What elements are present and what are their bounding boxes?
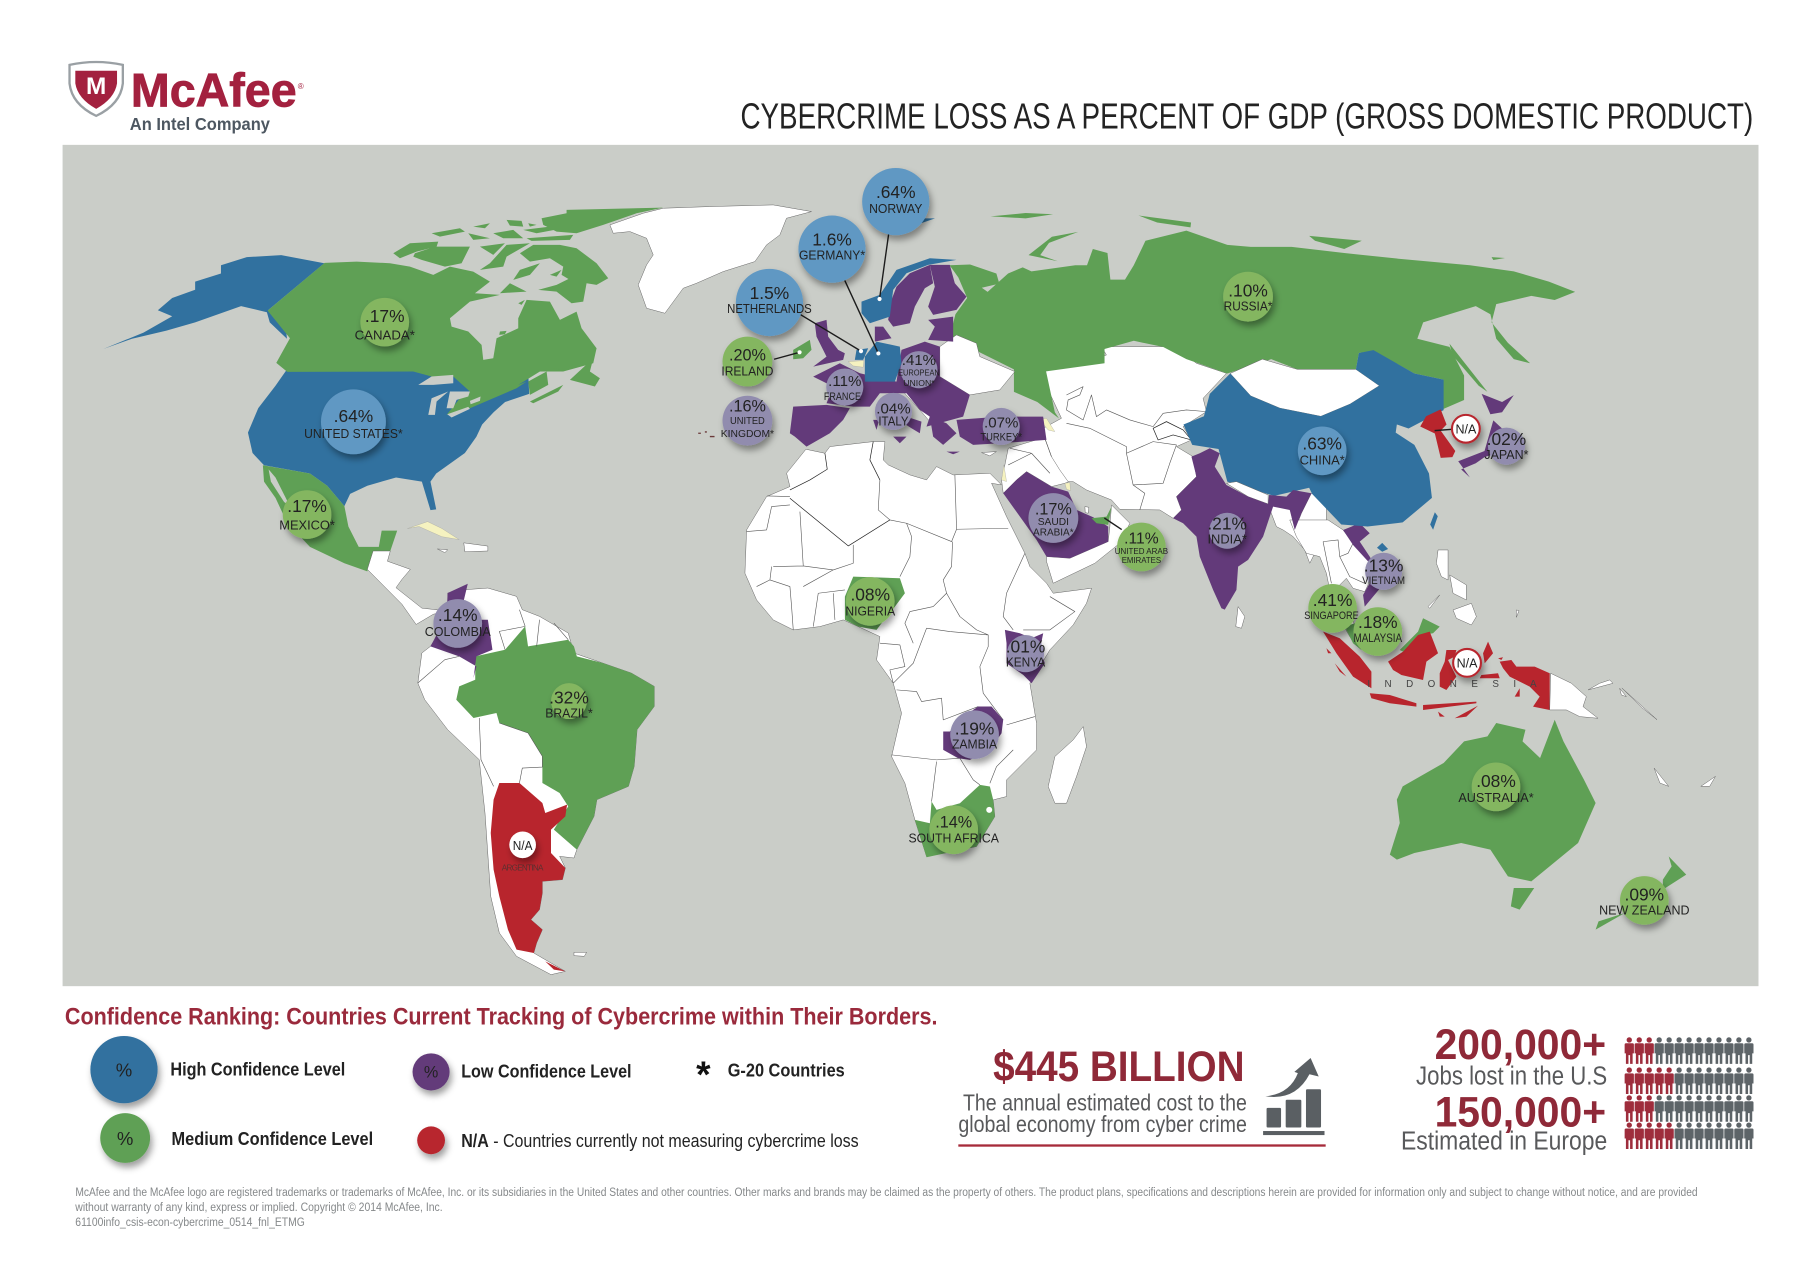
bubble: Australia	[1458, 763, 1534, 811]
logo: McAfee	[70, 62, 304, 134]
Mexico	[263, 465, 397, 571]
bubble: Malaysia	[1353, 607, 1402, 656]
Madagascar	[1048, 727, 1087, 803]
Cyprus	[981, 452, 996, 456]
connector lines	[774, 233, 1452, 530]
bubble: South Africa: .14%	[935, 813, 972, 831]
callout: jobs lost	[1401, 1021, 1753, 1156]
Israel highlight	[1002, 465, 1007, 482]
continent base	[418, 588, 654, 975]
bubble: Argentina N/A: N/A	[513, 838, 533, 853]
bubble: Brazil	[545, 683, 593, 720]
bubble: Indonesia N/A	[1453, 649, 1481, 677]
icon: shield	[70, 62, 123, 116]
bubble: Colombia: COLOMBIA	[425, 624, 491, 639]
bubble: Mexico	[279, 490, 335, 539]
bubble: Indonesia N/A: N/A	[1457, 655, 1478, 670]
bubble: Netherlands: NETHERLANDS	[727, 301, 812, 316]
South America borders	[418, 610, 568, 786]
bubble: China: .63%	[1302, 434, 1342, 454]
Mongolia	[1230, 359, 1379, 416]
bubble: Saudi Arabia	[1028, 493, 1078, 543]
bubble: Australia: .08%	[1476, 771, 1516, 791]
Falkland Islands	[574, 952, 587, 956]
bubble: Mexico: .17%	[287, 496, 327, 516]
bubble: Russia	[1223, 272, 1273, 322]
bubble: United Arab Emirates: EMIRATES	[1122, 555, 1161, 565]
Baltics	[928, 317, 953, 342]
Finland	[928, 265, 966, 315]
bubble: Netherlands: 1.5%	[750, 283, 789, 303]
bubble: Vietnam	[1362, 553, 1405, 590]
continental EU	[813, 342, 970, 427]
Philippines	[1428, 550, 1476, 625]
map: India	[1173, 448, 1311, 628]
Armenia highlight	[1039, 418, 1055, 432]
bubble: United Arab Emirates	[1115, 523, 1168, 571]
legend heading: Confidence Ranking: Countries Current Tracking of Cybercrime within Their Borders.	[65, 1003, 937, 1030]
Tajikistan dark border	[1153, 422, 1191, 440]
Maritime provinces and Newfoundland	[528, 358, 600, 403]
Argentina	[491, 783, 567, 971]
Kuwait highlight	[1065, 483, 1071, 491]
bubble: Brazil: BRAZIL*	[545, 705, 593, 720]
legend: not measured: N/A - Countries currently not measuring cybercrime loss	[461, 1130, 859, 1151]
bubble: European Union: EUROPEAN	[898, 367, 940, 377]
bubble: United Arab Emirates: UNITED ARAB	[1115, 546, 1168, 556]
Alaska	[103, 255, 324, 349]
callout description	[958, 1090, 1247, 1137]
New Zealand	[1596, 856, 1686, 930]
Brazil	[456, 626, 654, 850]
Ireland	[793, 340, 812, 359]
icon: rising bar chart	[1263, 1058, 1325, 1135]
Central Asia borders	[1045, 387, 1206, 510]
legend: G-20 countries: *	[696, 1053, 711, 1095]
bubble: Japan: .02%	[1487, 429, 1526, 449]
legend: low confidence	[413, 1053, 632, 1090]
bubble: South Korea N/A	[1452, 415, 1480, 443]
bubble: Singapore: .41%	[1313, 590, 1352, 610]
legend: high confidence	[90, 1036, 345, 1103]
Russia	[950, 231, 1575, 418]
bubble: Kenya: KENYA	[1006, 654, 1046, 669]
map: Central Asia base	[1039, 347, 1326, 563]
bubble: Nigeria: NIGERIA	[845, 603, 896, 618]
label: Indonesia: I N D O N E S I A	[1367, 679, 1537, 690]
bubble: European Union: UNION*	[903, 378, 935, 388]
bubble: Canada: CANADA*	[355, 328, 415, 343]
Europe jobs figure: 150,000+	[1435, 1088, 1606, 1136]
bubble: Norway: NORWAY	[869, 201, 923, 216]
legend: medium confidence: Medium Confidence Level	[172, 1128, 373, 1149]
US jobs figure: 200,000+	[1435, 1021, 1606, 1069]
footer legal text: 61100info_csis-econ-cybercrime_0514_fnl_ETMG	[75, 1217, 305, 1229]
Australia	[1390, 720, 1596, 881]
bubble: New Zealand	[1599, 876, 1690, 925]
Gulf of California	[269, 469, 290, 506]
bubble: South Africa	[909, 805, 999, 854]
Sweden	[888, 265, 933, 327]
bubble: Nigeria: .08%	[850, 584, 890, 604]
Belgium	[848, 361, 864, 367]
Papua New Guinea and nearby islands	[1550, 673, 1626, 718]
bubble: South Korea N/A: N/A	[1455, 421, 1477, 436]
bubble: United Kingdom	[721, 396, 774, 446]
Indochina and Malay peninsula	[1290, 520, 1370, 648]
map: Africa and Arabia	[745, 438, 1130, 857]
bubble: Italy: .04%	[876, 401, 911, 418]
logo wordmark: McAfee	[131, 65, 297, 118]
bubble: European Union	[898, 351, 940, 388]
Middle East borders	[1008, 448, 1050, 473]
bubble: Norway: .64%	[876, 182, 916, 202]
Europe jobs label: Estimated in Europe	[1401, 1128, 1607, 1156]
bubble: Vietnam: .13%	[1364, 555, 1403, 575]
bubble: United States	[304, 389, 403, 454]
Zambia	[943, 707, 1003, 760]
bubble: Germany: GERMANY*	[799, 248, 865, 263]
bubble: New Zealand: .09%	[1625, 884, 1664, 904]
bubble: Ireland: IRELAND	[721, 363, 773, 378]
Qatar	[1085, 507, 1089, 513]
bubble: Argentina N/A	[509, 831, 536, 858]
bubble: Saudi Arabia: SAUDI	[1038, 517, 1069, 528]
bubble: United Kingdom: KINGDOM*	[721, 429, 774, 440]
legend: medium confidence: %	[117, 1128, 133, 1149]
bubble: Ireland	[721, 337, 773, 386]
legend: high confidence: High Confidence Level	[170, 1058, 345, 1079]
Vietnam	[1343, 523, 1381, 607]
Africa borders	[747, 475, 1075, 802]
callout underline	[958, 1144, 1326, 1147]
icon: shield: M	[86, 73, 106, 100]
Netherlands	[855, 348, 868, 360]
map: North America south	[103, 255, 529, 624]
map panel	[63, 145, 1758, 986]
Central Asia land	[1043, 347, 1226, 518]
US jobs label: Jobs lost in the U.S	[1416, 1063, 1607, 1091]
United Kingdom	[813, 320, 845, 367]
label: Argentina: ARGENTINA	[502, 863, 544, 872]
bubble: Malaysia: .18%	[1358, 612, 1398, 632]
Central America	[367, 551, 448, 624]
China	[1183, 350, 1444, 527]
Sri Lanka	[1236, 607, 1245, 628]
bubble: Italy: ITALY	[878, 413, 909, 428]
bubble: Ireland: .20%	[729, 346, 766, 364]
Malaysia	[1345, 618, 1440, 652]
Nepal	[1226, 482, 1268, 504]
bubble: Kenya	[1006, 635, 1046, 672]
Denmark	[875, 327, 891, 342]
Italy and islands	[873, 410, 921, 443]
legend: high confidence: %	[116, 1060, 132, 1081]
bubble: India: .21%	[1207, 514, 1247, 534]
bubble: Vietnam: VIETNAM	[1362, 575, 1405, 587]
callout description: global economy from cyber crime	[958, 1111, 1247, 1137]
bubble: United States: UNITED STATES*	[304, 426, 403, 441]
Small Pacific island	[1516, 610, 1519, 617]
South Africa	[915, 785, 995, 857]
bubble: China	[1298, 426, 1347, 475]
Great Lakes	[418, 375, 481, 418]
Greece and Crete	[930, 417, 960, 454]
bubble: Kenya: .01%	[1006, 636, 1045, 656]
map: Canada and Greenland	[268, 205, 812, 418]
Japan	[1458, 394, 1514, 478]
Norway	[862, 258, 956, 323]
Nigeria	[845, 577, 905, 630]
bubble: United Arab Emirates: .11%	[1124, 530, 1159, 547]
bubble: India: INDIA*	[1207, 531, 1247, 546]
map: South-East Asia	[1290, 520, 1626, 718]
bubble: Netherlands	[727, 269, 812, 336]
bubble: Saudi Arabia: .17%	[1035, 501, 1072, 519]
bubble: France	[824, 369, 863, 406]
Eastern Europe base	[940, 335, 1015, 395]
Azores	[698, 431, 715, 437]
map: South America	[418, 584, 654, 975]
bubble: United Kingdom: UNITED	[730, 416, 765, 427]
bubble: Russia: RUSSIA*	[1224, 299, 1272, 314]
bubble: European Union: .41%	[902, 352, 936, 369]
Greenland	[610, 205, 812, 313]
bubble: United Kingdom: .16%	[729, 397, 766, 415]
Kenya	[1005, 630, 1045, 683]
Swaziland	[986, 807, 992, 813]
callout description: The annual estimated cost to the	[963, 1090, 1247, 1116]
bubble: Japan: JAPAN*	[1484, 447, 1528, 462]
Canadian Arctic islands	[393, 208, 663, 335]
Indochina borders	[1323, 540, 1365, 583]
India	[1173, 448, 1311, 610]
bubble: Turkey: TURKEY*	[980, 431, 1023, 443]
bubble: Turkey	[980, 408, 1023, 445]
bubble: Canada: .17%	[365, 306, 405, 326]
bubble: India	[1207, 513, 1247, 549]
registered mark: ®	[298, 82, 304, 91]
bubble: New Zealand: NEW ZEALAND	[1599, 902, 1690, 917]
legend: G-20 countries: G-20 Countries	[728, 1060, 845, 1081]
bubble: Nigeria	[845, 577, 896, 626]
bubble: Colombia	[425, 599, 491, 648]
bubble: Japan	[1484, 428, 1528, 465]
bubble: Zambia: .19%	[955, 719, 994, 739]
Colombia	[430, 584, 492, 678]
bubble: Singapore	[1304, 584, 1359, 633]
callout: $445 billion	[958, 1043, 1326, 1147]
Tasmania	[1511, 888, 1534, 910]
bubble: South Africa: SOUTH AFRICA	[909, 830, 999, 845]
bubble: Russia: .10%	[1228, 281, 1268, 301]
Levant and Iraq base	[1002, 438, 1073, 493]
bubble: Mexico: MEXICO*	[279, 518, 335, 533]
Korea	[1420, 409, 1455, 458]
bubble: Germany: 1.6%	[812, 230, 852, 250]
footer legal text	[74, 1187, 1698, 1229]
bubble: Zambia: ZAMBIA	[952, 737, 998, 752]
bubble: Australia: AUSTRALIA*	[1458, 790, 1534, 805]
bubble: Saudi Arabia: ARABIA*	[1033, 527, 1074, 538]
Cuba	[408, 522, 459, 540]
bubble: United States: .64%	[334, 406, 373, 426]
Svalbard	[891, 218, 935, 231]
people icon rows	[1625, 1037, 1753, 1149]
legend: low confidence: Low Confidence Level	[461, 1061, 632, 1082]
map: Oceania	[1390, 688, 1715, 930]
Myanmar and Bangladesh	[1268, 493, 1326, 563]
Canada mainland	[268, 262, 597, 415]
bubble: France: FRANCE	[824, 391, 861, 403]
bubble: Zambia	[950, 710, 999, 759]
bubble: Germany	[798, 216, 866, 283]
legend: low confidence: %	[424, 1064, 438, 1082]
Africa dark borders	[790, 442, 890, 546]
legend: not measured	[417, 1126, 859, 1154]
map: Russia and East Asia	[891, 213, 1575, 552]
bubble: Colombia: .14%	[438, 605, 478, 625]
map: Europe	[698, 258, 1046, 456]
Caribbean islands	[437, 543, 488, 553]
bubble: Norway	[862, 168, 929, 235]
callout figure: $445 BILLION	[993, 1043, 1245, 1091]
Germany	[865, 342, 901, 382]
Turkey	[956, 417, 1046, 445]
legend: medium confidence	[100, 1113, 373, 1163]
bubble: Turkey: .07%	[984, 415, 1018, 432]
Taiwan and Hainan	[1377, 512, 1438, 552]
United States	[248, 369, 529, 510]
bubble: China: CHINA*	[1300, 453, 1345, 468]
logo tagline: An Intel Company	[130, 114, 270, 134]
Balkans base	[903, 392, 943, 422]
bubble: Malaysia: MALAYSIA	[1353, 633, 1402, 645]
Africa base	[745, 442, 1092, 857]
bubble: Canada	[355, 298, 415, 346]
United Arab Emirates	[1092, 507, 1112, 525]
legend	[90, 1036, 859, 1163]
Russian Arctic islands and Sakhalin	[991, 213, 1505, 392]
bubble: Singapore: SINGAPORE	[1304, 610, 1359, 622]
Saudi Arabia	[1003, 472, 1108, 558]
legend: G-20 countries	[696, 1053, 845, 1095]
bubble: Italy	[875, 393, 912, 430]
Pacific islands	[1622, 688, 1715, 786]
footer legal text: without warranty of any kind, express or implied. Copyright © 2014 McAfee, Inc.	[74, 1202, 443, 1214]
Indonesia	[1323, 632, 1550, 718]
Iberia	[790, 405, 850, 447]
bubble: France: .11%	[828, 373, 861, 390]
bubble: Brazil: .32%	[549, 687, 589, 707]
Southern Arabia base	[1047, 505, 1130, 583]
